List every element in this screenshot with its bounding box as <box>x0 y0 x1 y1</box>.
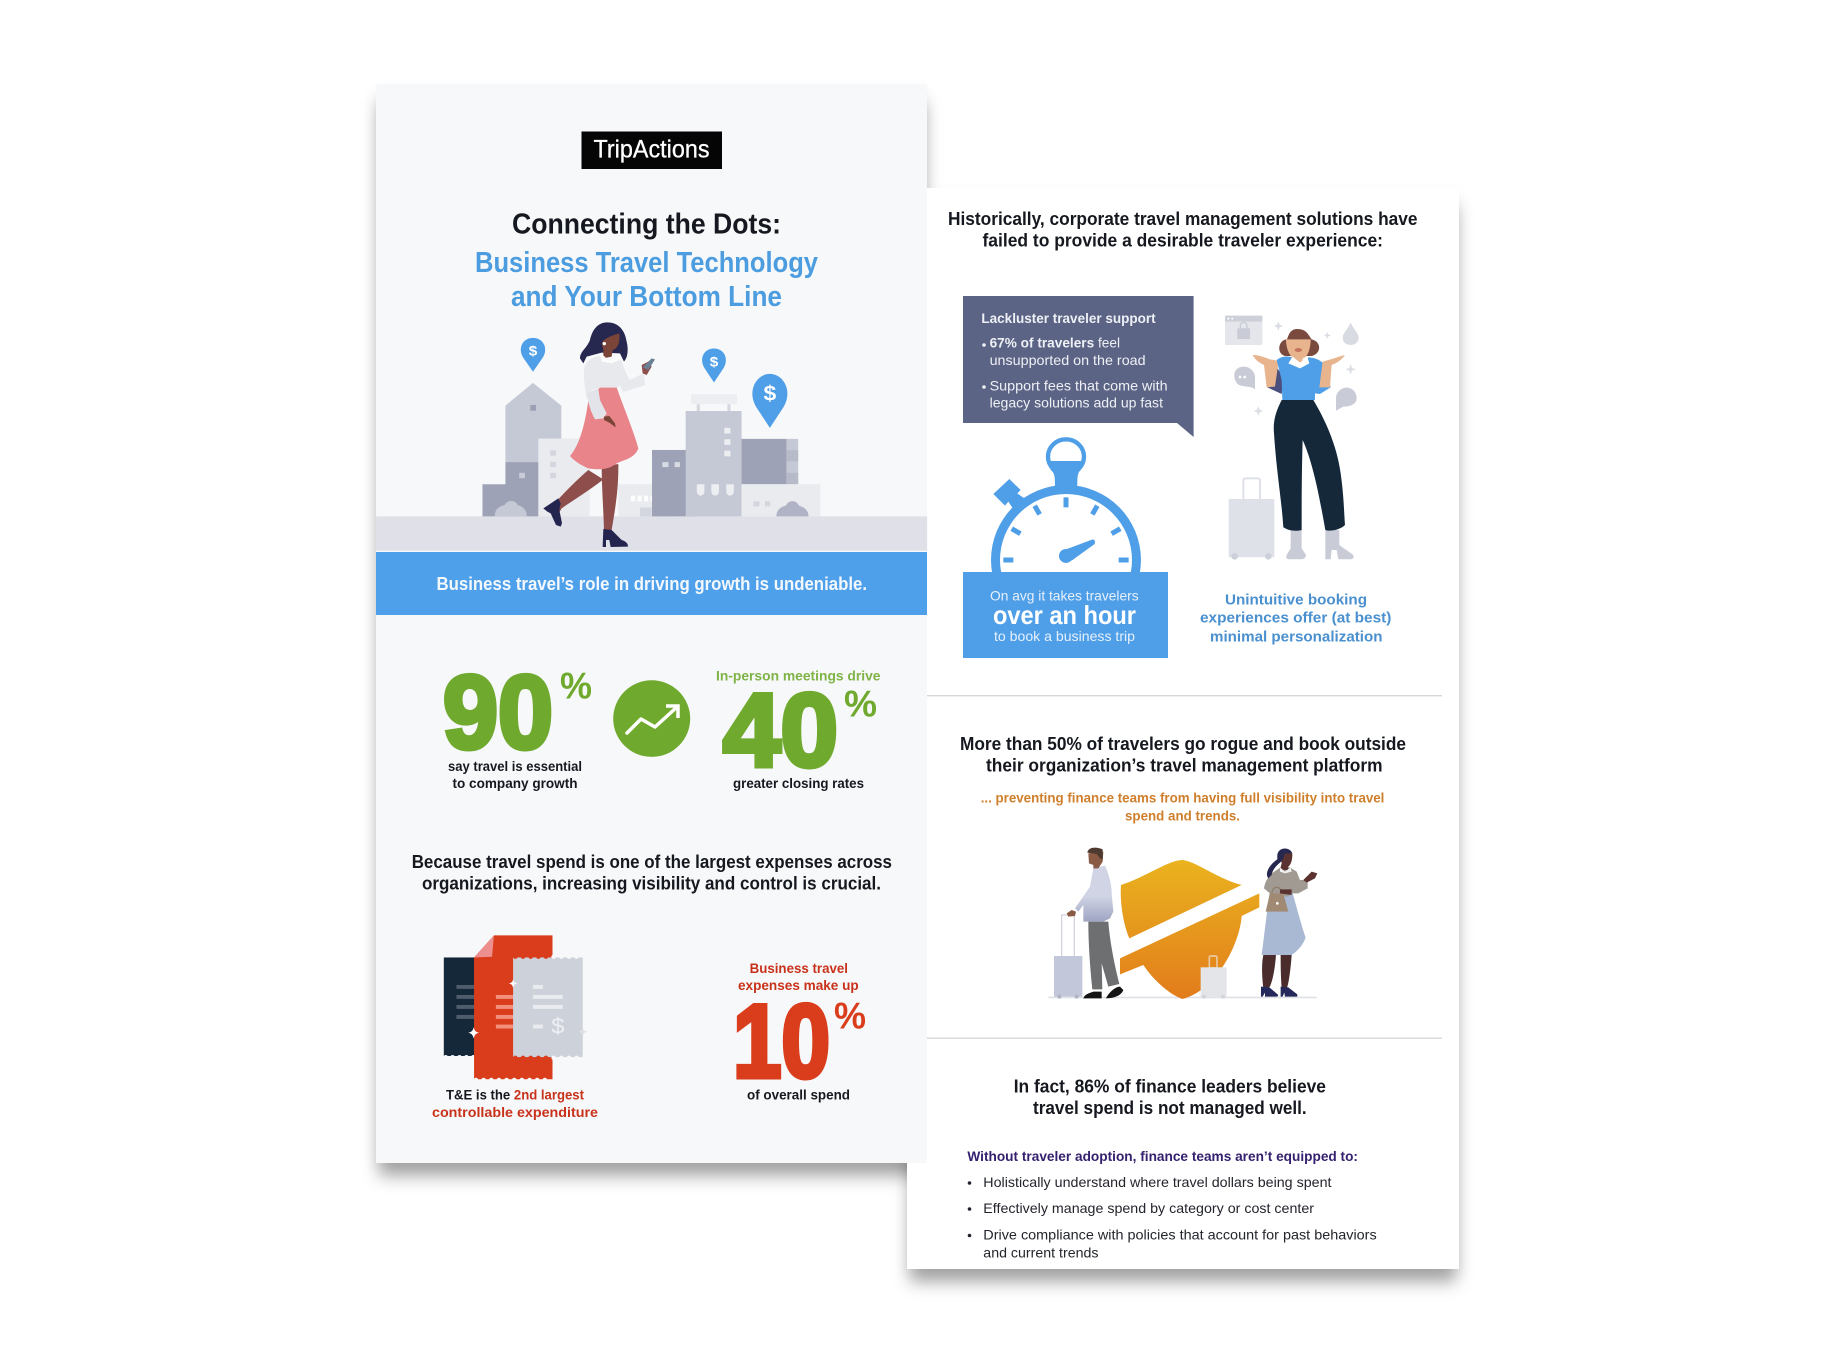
box: over an hour: over an hour <box>993 600 1136 630</box>
panel: left page background <box>376 84 927 1163</box>
subheading: preventing finance teams <box>981 790 1384 824</box>
icon: location pins: $ <box>529 344 538 360</box>
icon: receipts: $ <box>551 1013 565 1038</box>
icon: location pins: $ <box>763 381 777 405</box>
list: finance teams: Without traveler adoption, finance teams aren’t equipped to: <box>967 1148 1358 1164</box>
box: over an hour <box>963 572 1168 658</box>
icon: growth arrow circle <box>613 680 690 757</box>
left page content <box>376 132 927 1120</box>
stat: 10 percent: expenses make up <box>738 977 859 993</box>
stat: 10 percent: of overall spend <box>747 1087 850 1103</box>
box: over an hour: On avg it takes travelers <box>990 588 1139 604</box>
callout: lackluster traveler support <box>963 296 1194 437</box>
heading: go rogue <box>960 733 1406 776</box>
title: Business Travel Technology <box>475 247 818 279</box>
icon: receipts <box>444 935 588 1080</box>
title <box>475 208 818 313</box>
stat: 90 percent: % <box>560 666 592 706</box>
caption: T&E: T&E is the 2nd largest <box>446 1087 584 1103</box>
banner: Business travel’s role in driving growth is undeniable. <box>436 574 867 594</box>
stat: 10 percent: Business travel <box>750 960 848 976</box>
caption: unintuitive booking: Unintuitive booking <box>1225 591 1367 608</box>
icon: location pins: $ <box>710 355 719 371</box>
subheading: preventing finance teams: ... preventing finance teams from having full visibility into travel <box>981 790 1384 806</box>
heading: 86 percent: travel spend is not managed well. <box>1033 1097 1307 1118</box>
icon: location pins <box>521 338 787 428</box>
heading: historically: Historically, corporate travel management solutions have <box>948 208 1418 229</box>
illustration: city skyline <box>376 338 927 551</box>
panel: right page background <box>907 188 1459 1269</box>
stat: 40 percent: In-person meetings drive <box>716 668 881 684</box>
list: finance teams: and current trends <box>983 1245 1098 1261</box>
heading: go rogue: More than 50% of travelers go rogue and book outside <box>960 733 1406 754</box>
caption: unintuitive booking <box>1200 591 1391 646</box>
list: finance teams <box>967 1148 1377 1261</box>
statement: travel spend: organizations, increasing visibility and control is crucial. <box>422 873 881 894</box>
stat: 40 percent <box>716 668 881 791</box>
caption: T&E: controllable expenditure <box>432 1104 598 1120</box>
callout: lackluster traveler support: Support fees that come with <box>990 378 1168 394</box>
statement: travel spend <box>412 851 892 894</box>
heading: go rogue: their organization’s travel management platform <box>986 755 1383 776</box>
banner <box>376 552 927 615</box>
statement: travel spend: Because travel spend is one of the largest expenses across <box>412 851 892 872</box>
stat: 90 percent <box>443 655 592 791</box>
logo <box>582 132 722 169</box>
stat: 90 percent: 90 <box>443 655 553 771</box>
right page content <box>927 208 1442 1261</box>
stat: 90 percent: say travel is essential <box>448 758 582 774</box>
illustration: woman with phone <box>543 322 655 547</box>
illustration: broken shield with travelers <box>1048 848 1317 999</box>
heading: 86 percent: In fact, 86% of finance leaders believe <box>1014 1075 1326 1096</box>
callout: lackluster traveler support: Lackluster traveler support <box>981 310 1156 326</box>
caption: unintuitive booking: experiences offer (at best) <box>1200 610 1391 627</box>
stat: 10 percent: 10 <box>733 984 830 1100</box>
caption: T&E <box>432 1087 598 1120</box>
stat: 10 percent: % <box>834 996 866 1036</box>
callout: lackluster traveler support: legacy solutions add up fast <box>990 395 1163 411</box>
logo: TripActions <box>594 136 710 164</box>
heading: 86 percent <box>1014 1075 1326 1118</box>
callout: lackluster traveler support: unsupported on the road <box>990 352 1146 368</box>
heading: historically <box>948 208 1418 251</box>
icon: stopwatch <box>991 439 1141 635</box>
stat: 40 percent: 40 <box>723 673 838 789</box>
title: Connecting the Dots: <box>512 208 781 240</box>
stat: 90 percent: to company growth <box>452 775 578 791</box>
illustration: confused woman with suitcase <box>1225 316 1359 560</box>
callout: lackluster traveler support: 67% of travelers feel <box>990 335 1120 351</box>
shadow: left page <box>376 84 927 1163</box>
caption: unintuitive booking: minimal personalization <box>1210 629 1382 646</box>
list: finance teams: Holistically understand where travel dollars being spent <box>983 1174 1332 1190</box>
stat: 40 percent: greater closing rates <box>733 775 864 791</box>
list: finance teams: Drive compliance with policies that account for past behaviors <box>983 1227 1377 1243</box>
box: over an hour: to book a business trip <box>994 628 1135 644</box>
list: finance teams: Effectively manage spend by category or cost center <box>983 1200 1314 1216</box>
heading: historically: failed to provide a desirable traveler experience: <box>982 230 1383 251</box>
stat: 40 percent: % <box>844 684 877 724</box>
title: and Your Bottom Line <box>511 281 782 313</box>
subheading: preventing finance teams: spend and trends. <box>1125 808 1240 824</box>
